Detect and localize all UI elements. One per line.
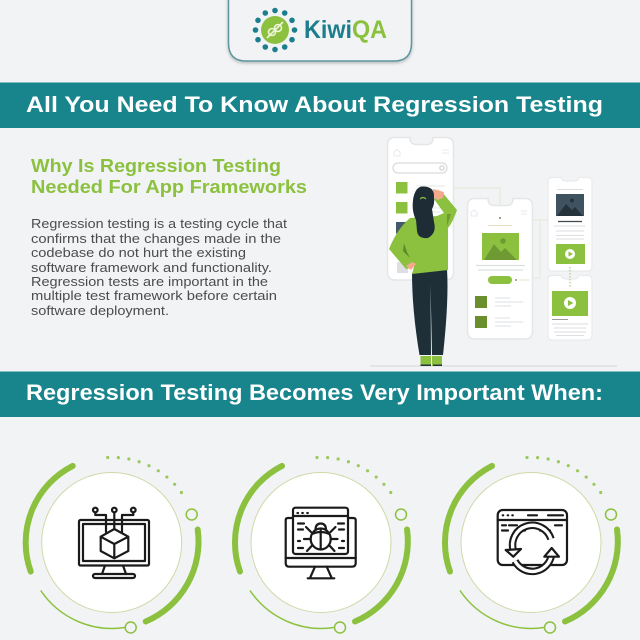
- phone screen 3: [548, 178, 592, 271]
- panel: circle 1 monitor with cube: [26, 457, 199, 633]
- shoes: [420, 356, 442, 366]
- body text block: Regression tests are important in the: [31, 274, 268, 289]
- legs: [412, 269, 448, 355]
- panel: circle 3 window with refresh arrows: [445, 457, 618, 633]
- circular frame: [445, 457, 618, 633]
- illustration: person reviewing app screens: [370, 138, 617, 366]
- logo card: [228, 0, 412, 61]
- circular frame: [235, 457, 408, 633]
- section banner: [0, 372, 640, 417]
- hair: [413, 186, 435, 238]
- body text block: software framework and functionality.: [31, 260, 272, 275]
- icon: KiwiQA logo mark: [253, 8, 297, 52]
- circular frame: [26, 457, 199, 633]
- title: All You Need To Know About Regression Testing: [26, 92, 603, 117]
- icon: monitor with cube: [79, 508, 149, 578]
- icon: monitor with bug: [286, 508, 356, 578]
- body text block: confirms that the changes made in the: [31, 231, 281, 246]
- body text block: [31, 216, 287, 318]
- body text block: codebase do not hurt the existing: [31, 245, 246, 260]
- person figure: [389, 186, 457, 366]
- icon: window with refresh arrows: [498, 510, 567, 571]
- body text block: multiple test framework before certain: [31, 288, 277, 303]
- hands: [406, 189, 444, 270]
- section banner heading: Regression Testing Becomes Very Important When:: [26, 380, 603, 405]
- panel: circle 2 monitor with bug: [235, 457, 408, 633]
- torso and arms: [389, 192, 457, 274]
- phone screen 2: [468, 198, 532, 339]
- phone screen 4: [548, 267, 592, 340]
- logo wordmark: KiwiQA: [304, 16, 387, 44]
- title banner: [0, 82, 640, 128]
- body text block: software deployment.: [31, 303, 169, 318]
- phone screen 1: [388, 138, 454, 280]
- section heading: Needed For App Frameworks: [31, 176, 307, 197]
- body text block: Regression testing is a testing cycle that: [31, 216, 287, 231]
- connector lines: [449, 188, 548, 278]
- section heading: Why Is Regression Testing: [31, 155, 281, 176]
